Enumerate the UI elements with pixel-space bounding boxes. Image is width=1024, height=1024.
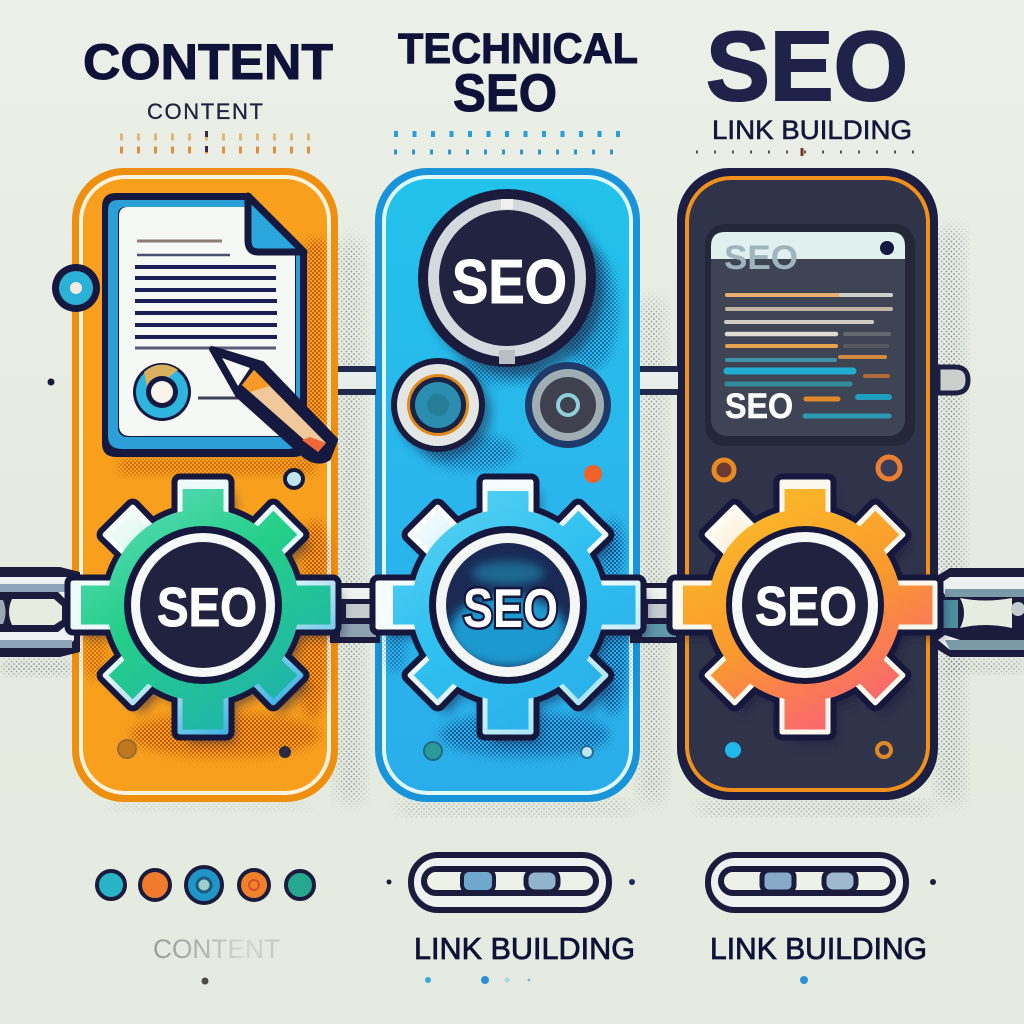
halftone shadow	[380, 245, 634, 764]
label: link building 1: LINK BUILDING	[414, 931, 635, 966]
upper connector: right stub	[938, 367, 968, 393]
panel: technical SEO	[375, 168, 640, 802]
label: faded content: CONTENT	[153, 934, 280, 964]
icon: chain link 1	[411, 855, 609, 910]
text lines on document	[135, 241, 277, 398]
gear: link building SEO: SEO	[755, 575, 857, 637]
upper connector: panel 2 to 3	[640, 366, 678, 395]
icon: chain link 2	[708, 855, 906, 910]
title: Technical SEO column heading	[398, 25, 638, 123]
icon: ring dial	[391, 358, 491, 458]
label: link building 2: LINK BUILDING	[710, 931, 927, 966]
title: Technical SEO column heading: SEO	[453, 64, 557, 123]
blurred SEO label: SEO	[724, 239, 798, 277]
browser window	[705, 224, 915, 446]
chain: left link	[0, 567, 80, 657]
title: Content column heading	[83, 34, 333, 124]
icon: folded page corner	[248, 196, 304, 252]
text lines	[726, 295, 891, 416]
connector stub left of panel 1	[48, 378, 54, 386]
icon: large SEO dial	[418, 189, 604, 376]
icon: small gear dial	[525, 362, 611, 448]
gear: link building SEO	[675, 482, 944, 743]
icon: teal dot badge	[52, 264, 100, 312]
chain: middle link 1	[330, 583, 380, 643]
chain: right link	[930, 568, 1024, 657]
gear: content SEO	[73, 482, 342, 743]
icon row: coloured dots	[97, 867, 314, 903]
upper connector: panel 1 to 2	[338, 366, 376, 395]
orange indicator rings	[714, 457, 900, 480]
orange dot	[584, 465, 602, 483]
icon: document	[102, 193, 335, 461]
panel: content	[0, 168, 1024, 984]
browser window: SEO	[725, 387, 793, 426]
icon: pencil	[212, 349, 335, 461]
title: Technical SEO column heading: TECHNICAL	[398, 25, 638, 73]
small accent dots	[202, 879, 936, 984]
decorative dot rows under headings	[120, 134, 918, 156]
gear: technical SEO	[378, 482, 647, 743]
title: Content column heading: CONTENT	[83, 34, 333, 90]
subtitle: content: CONTENT	[147, 99, 263, 124]
panel halftone shadow	[78, 234, 335, 764]
icon: circular badge on document	[133, 363, 191, 421]
panel: link building	[677, 168, 938, 800]
icon: large SEO dial: SEO	[452, 248, 567, 317]
title: SEO Link Building column heading: SEO	[706, 11, 908, 121]
gear: technical SEO: SEO	[463, 577, 558, 639]
gear: content SEO: SEO	[157, 576, 257, 638]
chain: middle link 2	[630, 583, 680, 643]
panel small dots	[118, 470, 891, 760]
subtitle: link building: LINK BUILDING	[712, 115, 912, 145]
